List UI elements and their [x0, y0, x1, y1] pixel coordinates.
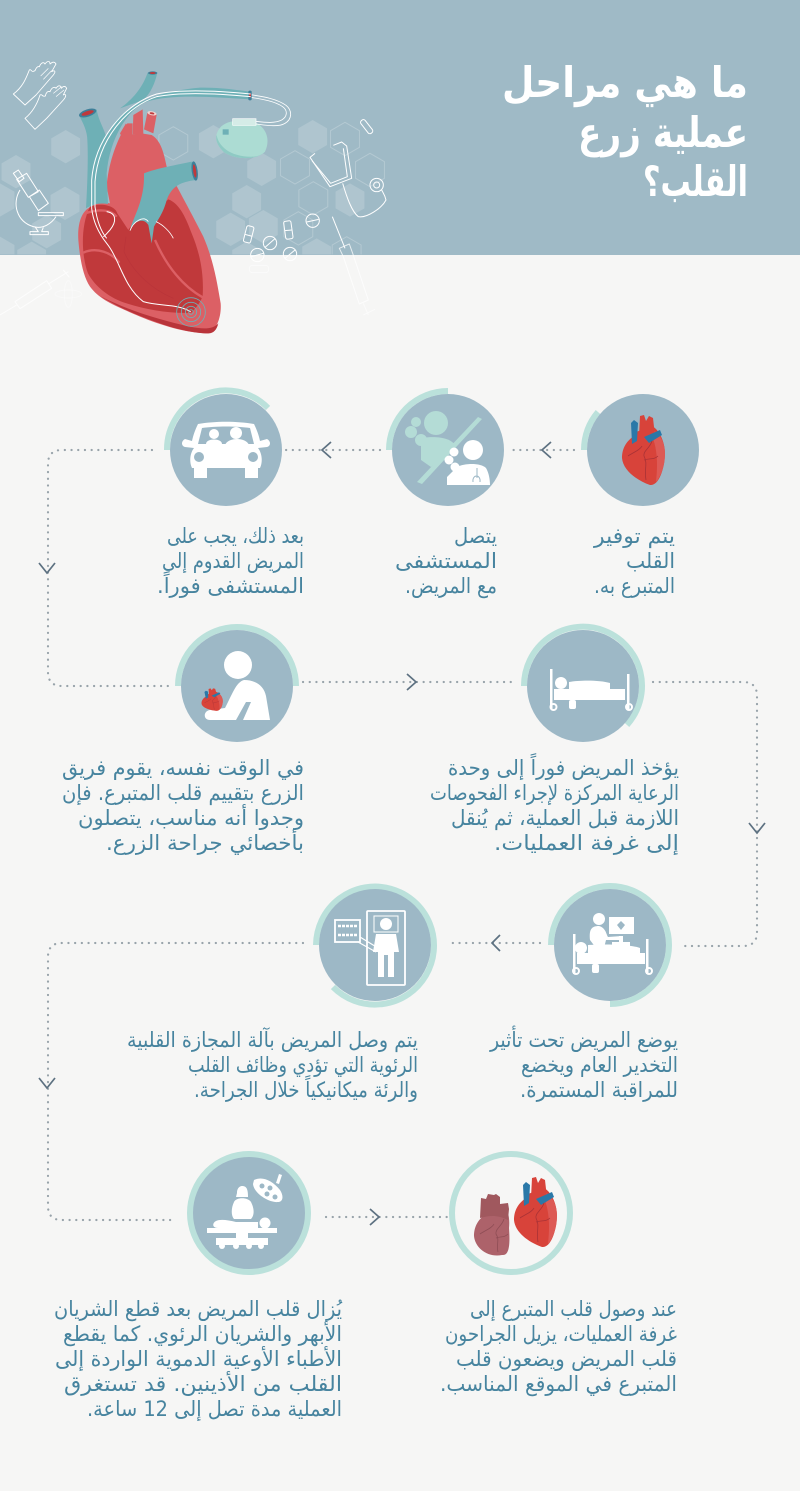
step 2 text: [395, 524, 497, 598]
title: عملية زرع: [578, 108, 748, 157]
step 8 text: غرفة العمليات، يزيل الجراحون: [445, 1322, 677, 1346]
step 3 text: المريض القدوم إلى: [162, 549, 304, 574]
header illustration: pacemaker heart and medical line art: [0, 61, 386, 333]
step 9 text: القلب من الأذينين. قد تستغرق: [64, 1371, 342, 1396]
step 8 text: قلب المريض ويضعون قلب: [456, 1347, 677, 1371]
icon: pacemaker device and lead: [216, 95, 291, 158]
step 5 text: في الوقت نفسه، يقوم فريق: [62, 756, 304, 780]
step 3 text: المستشفى فوراً.: [157, 570, 304, 598]
icon: heart body: [78, 109, 221, 333]
step 9 text: [54, 1297, 343, 1422]
step 7 text: يتم وصل المريض بآلة المجازة القلبية: [127, 1027, 418, 1053]
step 5 text: الزرع بتقييم قلب المتبرع. فإن: [62, 781, 304, 806]
step 1 text: المتبرع به.: [594, 574, 675, 598]
step 5 text: [62, 756, 304, 855]
step 1 text: القلب: [626, 549, 675, 573]
step 8 text: المتبرع في الموقع المناسب.: [440, 1372, 677, 1396]
step 8 text: عند وصول قلب المتبرع إلى: [470, 1297, 677, 1322]
icon: veins: [78, 71, 252, 243]
step 8 text: [440, 1297, 677, 1396]
step 7 icon: heart-lung bypass machine: [316, 887, 434, 1005]
step 7 text: والرئة ميكانيكياً خلال الجراحة.: [194, 1074, 418, 1102]
step 6 text: التخدير العام ويخضع: [521, 1053, 678, 1077]
title: ما هي مراحل: [502, 58, 748, 108]
connector: step 2 to 3: [283, 442, 380, 458]
step 6 text: [489, 1025, 678, 1102]
icon: gloves: [13, 61, 67, 129]
step 8 icon: replacing diseased heart with donor heart: [452, 1154, 570, 1272]
title: [502, 58, 748, 206]
step 2 text: يتصل: [454, 524, 497, 548]
icon: syringe left: [0, 270, 82, 315]
icon: stethoscope: [310, 142, 386, 217]
step 7 text: الرئوية التي تؤدي وظائف القلب: [188, 1053, 418, 1077]
icon: microscope: [13, 170, 63, 235]
step 7 text: [127, 1027, 418, 1102]
connector: step 9 to 8: [326, 1209, 448, 1225]
header band: [0, 0, 800, 255]
step 4 text: الرعاية المركزة لإجراء الفحوصات: [430, 781, 679, 805]
step 6 icon: anaesthesia and monitoring: [551, 886, 669, 1004]
step 4 text: إلى غرفة العمليات.: [494, 831, 679, 856]
step 4 text: يؤخذ المريض فوراً إلى وحدة: [448, 752, 679, 781]
step 1 text: يتم توفير: [593, 524, 675, 549]
step 2 text: مع المريض.: [405, 574, 497, 598]
step 9 text: الأبهر والشريان الرئوي. كما يقطع: [63, 1321, 342, 1346]
icon: pacing lead: [92, 91, 251, 326]
step 1 text: [593, 524, 675, 598]
step 9 text: الأطباء الأوعية الدموية الواردة إلى: [55, 1346, 342, 1372]
step 9 text: يُزال قلب المريض بعد قطع الشريان: [54, 1297, 343, 1321]
step 5 icon: team assessing heart: [178, 627, 296, 742]
step 4 icon: patient on bed: [524, 627, 642, 742]
connector: step 1 to 2: [513, 442, 574, 458]
step 3 icon: car: [167, 390, 282, 506]
step 9 text: العملية مدة تصل إلى 12 ساعة.: [87, 1397, 342, 1422]
icon: pill capsules and tablets: [243, 119, 374, 273]
step 6 text: يوضع المريض تحت تأثير: [489, 1025, 678, 1052]
step 4 text: [430, 752, 679, 856]
connector: step 3 to 5: [39, 450, 170, 686]
title: القلب؟: [643, 157, 748, 206]
step 5 text: بأخصائي جراحة الزرع.: [106, 828, 304, 855]
connector: step 6 to 7: [449, 935, 540, 951]
connector: step 7 to 9: [39, 943, 303, 1220]
step 1 icon: donor heart: [584, 394, 699, 506]
connector: step 5 to 4: [303, 674, 515, 690]
step 6 text: للمراقبة المستمرة.: [520, 1078, 678, 1102]
step 2 icon: hospital phones patient: [389, 391, 504, 506]
connector: step 4 to 6: [653, 682, 765, 946]
step 5 text: وجدوا أنه مناسب، يتصلون: [78, 804, 304, 830]
step 9 icon: surgery: [190, 1154, 308, 1272]
step 3 text: [157, 524, 304, 598]
step 3 text: بعد ذلك، يجب على: [167, 524, 304, 548]
step 2 text: المستشفى: [395, 549, 497, 573]
step 4 text: اللازمة قبل العملية، ثم يُنقل: [451, 806, 679, 831]
icon: syringe right: [332, 217, 375, 315]
